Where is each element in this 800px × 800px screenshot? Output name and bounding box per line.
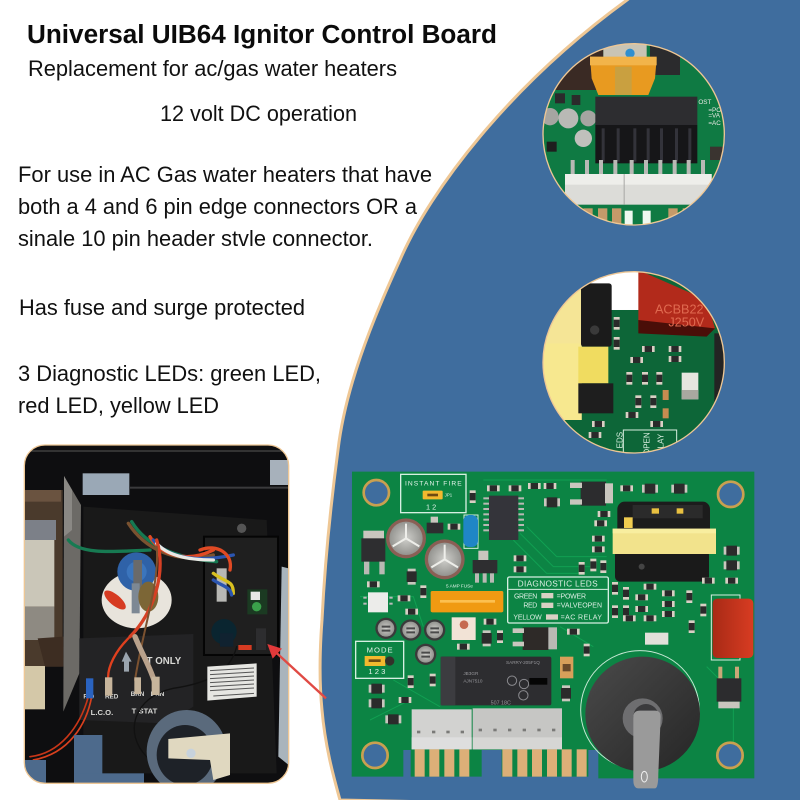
- text: compatibility: both a 4 and 6 pin edge connectors OR a: [18, 194, 418, 219]
- connector headers: [412, 708, 562, 749]
- instant fire jumper: 1 2: [426, 502, 436, 511]
- top row components: [448, 482, 687, 552]
- instruction label plate: RED: [105, 693, 119, 700]
- photo: fuse and relay close-up: [540, 40, 730, 230]
- photo: fuse and relay close-up: =PO: [708, 107, 721, 114]
- scattered SMD parts: [367, 546, 740, 724]
- photo: water heater installation: [24, 445, 326, 793]
- photo: transformer and capacitor close-up: OPEN: [642, 432, 651, 455]
- diagnostic LEDs panel: =AC RELAY: [561, 615, 602, 622]
- mounting holes: [362, 480, 743, 768]
- text: diagnostic LEDs: red LED, yellow LED: [18, 393, 219, 418]
- photo: transformer and capacitor close-up: J250V: [668, 316, 705, 330]
- instruction label plate: R D: [83, 693, 95, 700]
- mode jumper: MODE: [367, 646, 393, 655]
- trace pattern: [360, 480, 733, 743]
- diagnostic LEDs panel: =POWER: [557, 593, 586, 600]
- gold edge fingers: [415, 749, 587, 777]
- title: Universal UIB64 Ignitor Control Board: [27, 21, 497, 49]
- instant fire jumper: [401, 474, 466, 513]
- ignitor control box: [204, 524, 278, 655]
- instant fire jumper: JP1: [445, 493, 453, 498]
- arrow: pointer to fuse holder: [267, 644, 326, 698]
- mode jumper: [356, 641, 404, 678]
- main chip: [463, 496, 524, 548]
- MOSFET lower right: [717, 667, 741, 708]
- warning sticker: [207, 663, 257, 701]
- instruction label plate: BRN: [131, 691, 145, 698]
- panel: curved blue background: [320, 0, 800, 800]
- photo: fuse and relay close-up: =AC: [708, 120, 721, 127]
- instant fire jumper: INSTANT FIRE: [405, 481, 462, 488]
- text: diagnostic LEDs: [18, 361, 321, 418]
- optocouplers and power transistor: [363, 592, 668, 650]
- photo: fuse and relay close-up: OST: [698, 99, 711, 106]
- right side strip label: [278, 567, 289, 765]
- mode jumper: 1 2 3: [368, 667, 385, 676]
- relay: JB3GR: [463, 671, 479, 676]
- instruction label plate: [79, 634, 193, 723]
- fuse: 5 AMP FUSe: [446, 584, 473, 589]
- text: compatibility: [18, 162, 432, 251]
- diagnostic LEDs panel: RED: [523, 603, 537, 610]
- photo: transformer and capacitor close-up: EDS: [616, 432, 625, 448]
- film capacitor: [711, 595, 753, 660]
- diagnostic LEDs panel: =VALVEOPEN: [557, 603, 602, 610]
- instruction label plate: BRN: [151, 691, 165, 698]
- relay: 507 18C: [491, 700, 511, 706]
- circuit board: [352, 472, 754, 788]
- diagnostic LEDs panel: GREEN: [514, 593, 537, 600]
- fuse: [431, 584, 503, 612]
- relay: SARRY-205F1Q: [506, 660, 540, 665]
- instruction label plate: T STAT: [132, 706, 158, 715]
- relay: AJN7510: [463, 679, 483, 684]
- diagnostic LEDs panel: YELLOW: [513, 615, 542, 622]
- text: fuse protection: Has fuse and surge protected: [19, 295, 305, 320]
- diagnostic LEDs panel: [508, 577, 608, 623]
- ignition coil: [581, 651, 700, 788]
- photo: transformer and capacitor close-up: LAY: [656, 433, 665, 448]
- text: compatibility: sinale 10 pin header stvle connector.: [18, 226, 373, 251]
- relay: [441, 657, 551, 706]
- wire connectors: [86, 677, 160, 698]
- voltage regulators: [361, 517, 497, 583]
- text: compatibility: For use in AC Gas water heaters that have: [18, 162, 432, 187]
- burner plate and dial: [83, 507, 277, 773]
- photo: transformer and capacitor close-up: ACBB22: [655, 302, 704, 316]
- transformer: [613, 502, 716, 582]
- diagnostic LEDs panel: DIAGNOSTIC LEDS: [518, 579, 598, 589]
- subtitle: Replacement for ac/gas water heaters: [28, 56, 397, 81]
- PCB body: [352, 472, 754, 778]
- instruction label plate: L.C.O.: [91, 708, 113, 717]
- metal panel and left bracket: [24, 450, 289, 712]
- photo: transformer and capacitor close-up: [540, 270, 731, 460]
- instruction label plate: T ONLY: [147, 656, 182, 667]
- electrolytic capacitors: [375, 518, 465, 665]
- text: voltage: 12 volt DC operation: [160, 101, 357, 126]
- photo: fuse and relay close-up: =VA: [708, 113, 721, 120]
- bottom burner tube: [25, 710, 230, 783]
- wire harness: [30, 522, 237, 765]
- text: diagnostic LEDs: 3 Diagnostic LEDs: green LED,: [18, 361, 321, 386]
